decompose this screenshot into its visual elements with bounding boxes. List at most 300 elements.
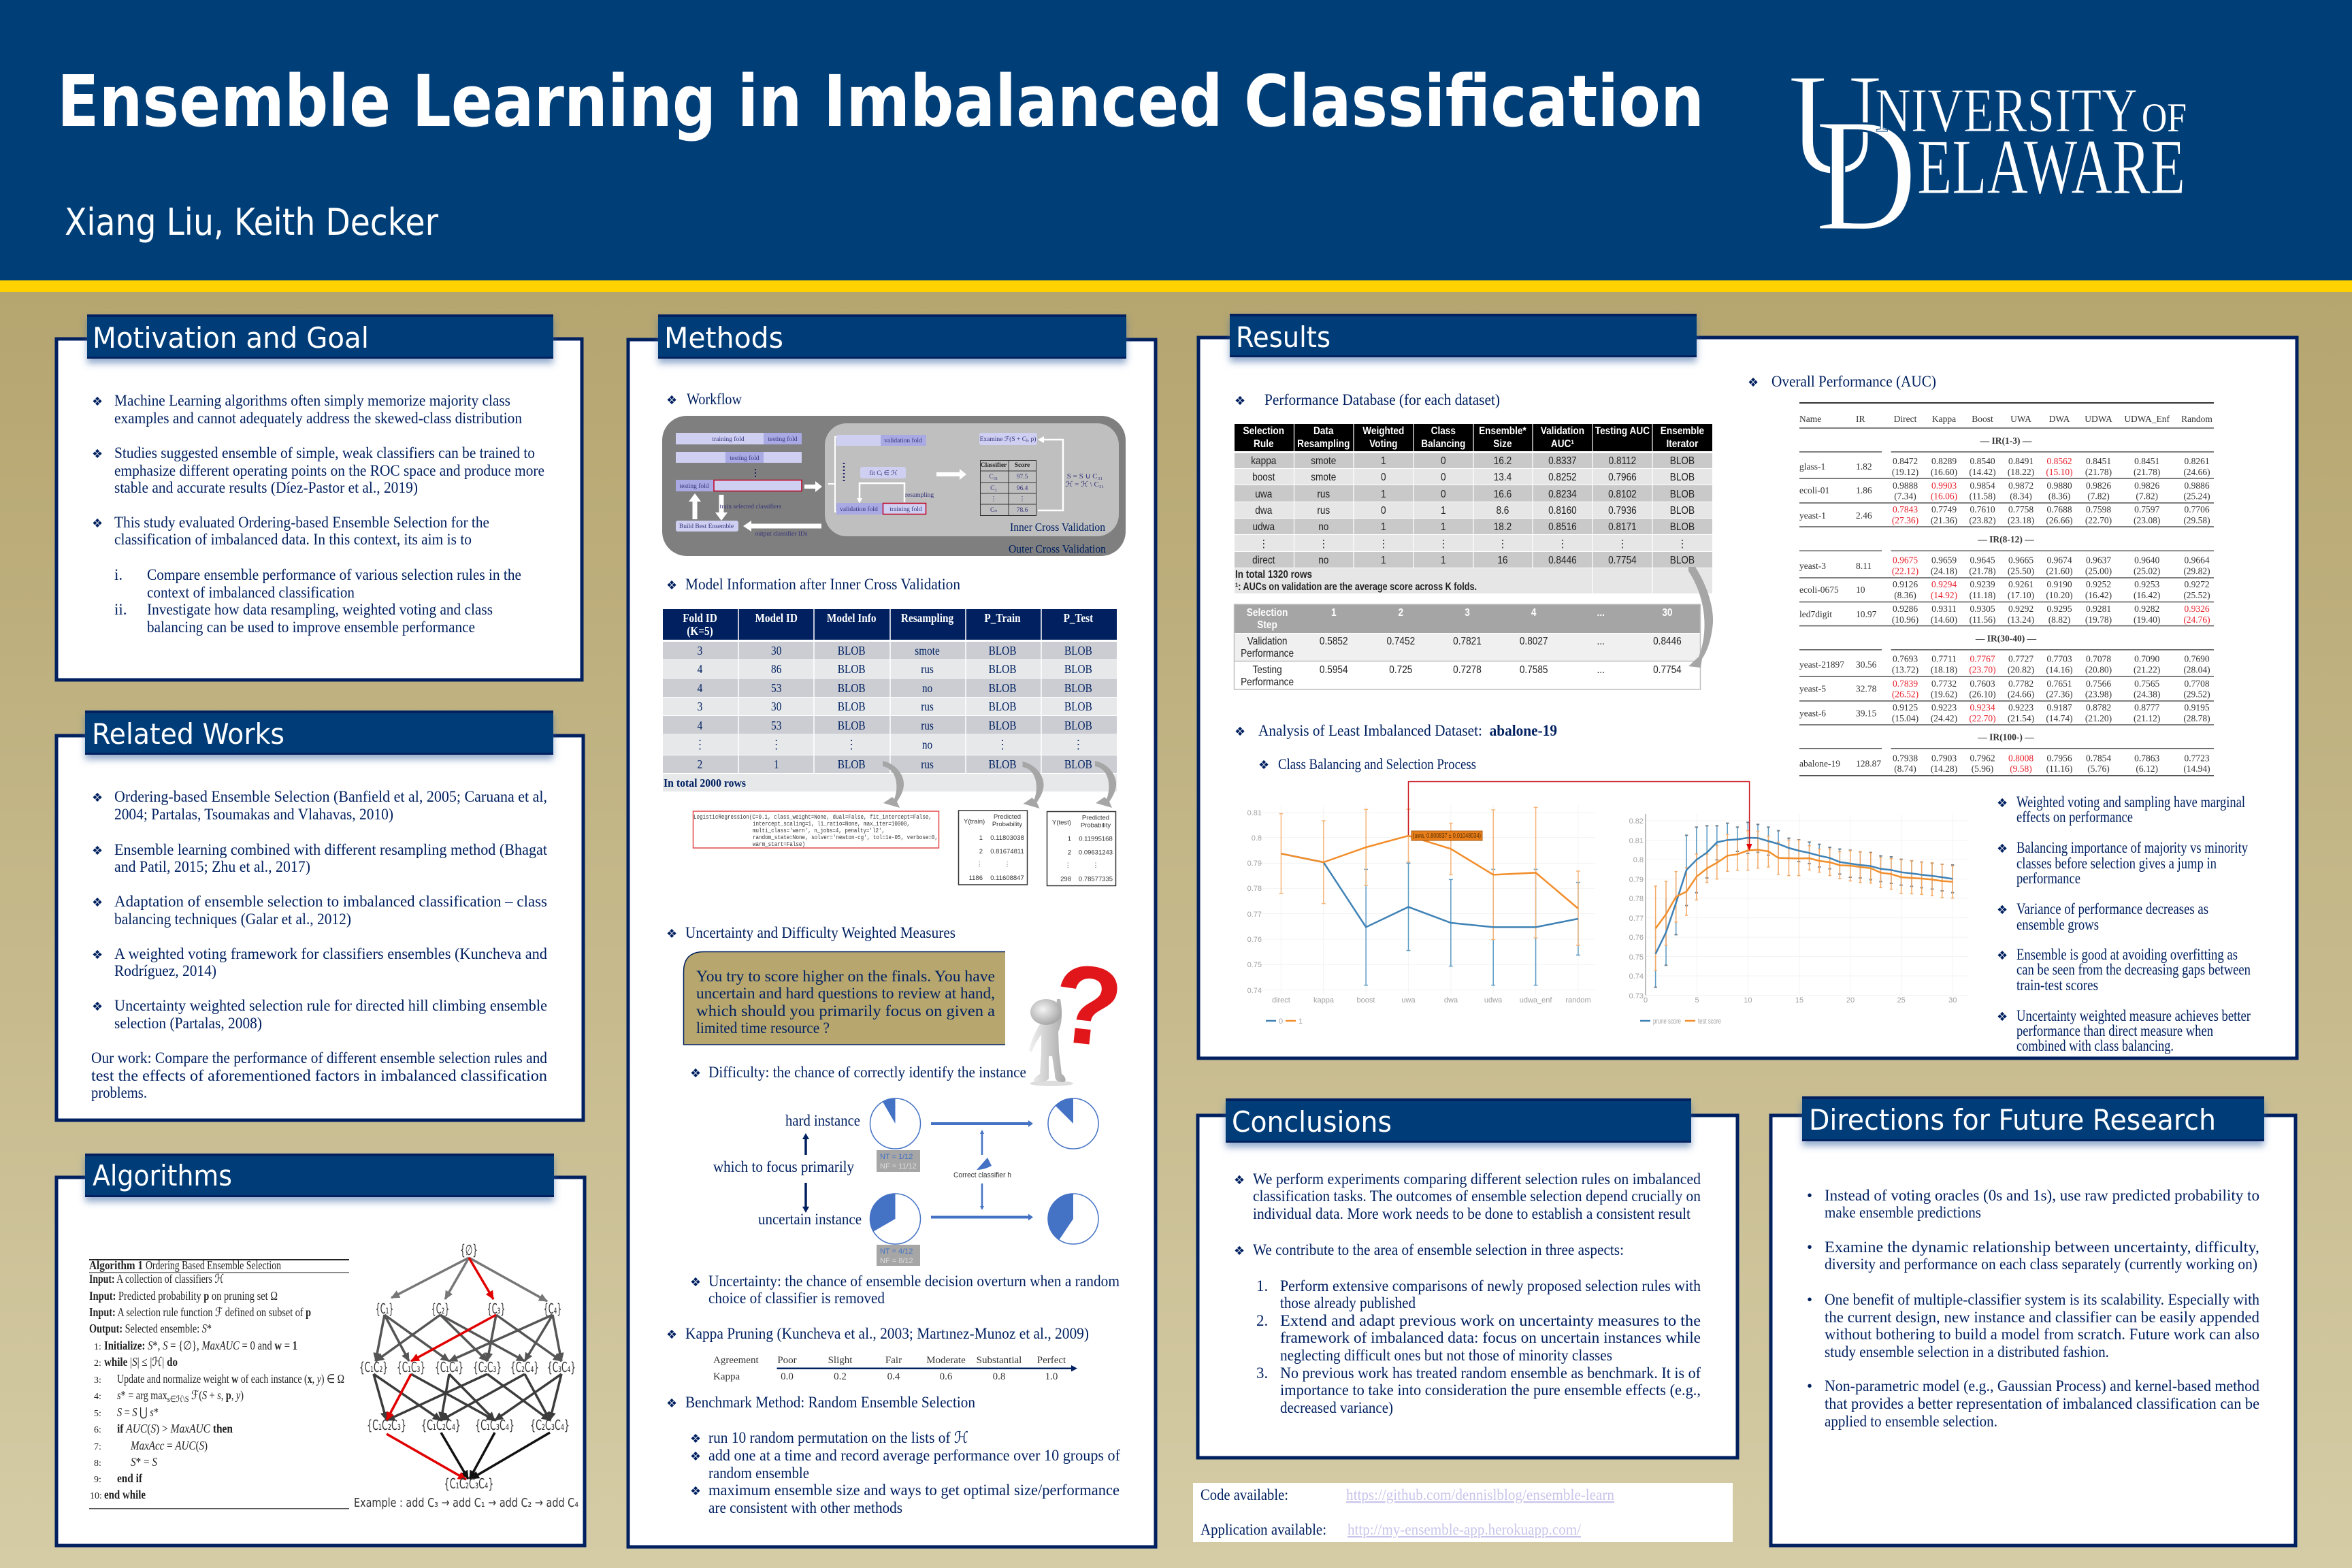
table: performance database: 0	[1381, 472, 1386, 483]
table: overall performance: 0.7603	[1970, 679, 1995, 689]
subheading: performance database: Performance Database (for each dataset)	[1264, 391, 1500, 408]
table: overall performance: 0.7690	[2184, 653, 2210, 664]
subheading: workflow	[666, 391, 742, 408]
table: performance database: udwa	[1253, 521, 1275, 533]
table: model information: BLOB	[1064, 644, 1092, 657]
table: overall performance: (21.78)	[1969, 566, 1996, 576]
lattice diagram: ordering based selection: {C₂C₃}	[473, 1359, 502, 1375]
table: overall performance: (21.22)	[2134, 664, 2160, 675]
table: performance database: ¹: AUCs on validation are the average score across K folds.	[1235, 581, 1477, 593]
caption: example selection order: Example : add C₃ → add C₁ → add C₂ → add C₄	[354, 1496, 578, 1510]
table: overall performance: yeast-6	[1799, 708, 1826, 719]
subheading: overall performance: Overall Performance (AUC)	[1771, 373, 1936, 390]
text: related works bullets: balancing techniques (Galar et al., 2012)	[114, 911, 351, 928]
text: benchmark bullets: random ensemble	[708, 1465, 809, 1482]
table: overall performance: (16.60)	[1931, 467, 1957, 477]
table: overall performance: (21.78)	[2085, 467, 2112, 477]
table: test probabilities: 1	[1068, 836, 1071, 843]
table: model information: Model ID	[755, 611, 798, 625]
table: performance database: ⋮	[1678, 538, 1687, 550]
table: overall performance: 128.87	[1856, 758, 1881, 769]
table: overall performance: 0.7651	[2046, 679, 2072, 689]
table: overall performance: (26.52)	[1892, 689, 1918, 700]
text: future research list: Examine the dynamic relationship between uncertainty, difficulty,	[1825, 1239, 2259, 1256]
text: conclusions list: importance to take into consideration the pure ensemble effects (e.g.,	[1280, 1382, 1701, 1399]
text: conclusions list	[1234, 1171, 1701, 1416]
table: overall performance: 10	[1856, 585, 1865, 595]
table: overall performance: (24.66)	[2008, 689, 2034, 700]
table: overall performance: (19.40)	[2134, 615, 2160, 625]
callout: code and application links	[1193, 1483, 1733, 1542]
table: train probabilities: 0.11608847	[990, 875, 1024, 882]
lattice diagram: ordering based selection: {C₁}	[376, 1301, 393, 1317]
scale: kappa agreement	[713, 1355, 1077, 1382]
table: model information: Fold ID	[683, 611, 717, 625]
table: performance database: ⋮	[1259, 538, 1269, 550]
pseudocode: algorithm 1: S + s, p, y)	[202, 1388, 244, 1402]
text: motivation bullets: Investigate how data resampling, weighted voting and class	[147, 601, 493, 618]
panel: related works	[56, 710, 583, 1120]
table: overall performance: 0.8261	[2184, 456, 2210, 466]
table: overall performance: (23.70)	[1969, 664, 1996, 675]
text: related works bullets	[91, 788, 548, 1101]
table: overall performance: 0.7566	[2086, 679, 2111, 689]
pseudocode: algorithm 1: Input: A selection rule function ℱ defined on subset of p	[89, 1305, 311, 1319]
table: overall performance: 0.7727	[2008, 653, 2034, 664]
table: performance database: 1	[1381, 521, 1386, 533]
table: performance database: 1	[1381, 455, 1386, 467]
table: model information: 2	[698, 757, 702, 771]
table: model information: 3	[698, 700, 702, 713]
table: performance database: 16	[1497, 555, 1507, 566]
table: selection steps: 3	[1465, 607, 1470, 619]
table: overall performance: 0.7758	[2008, 504, 2034, 514]
table: performance database: kappa	[1251, 455, 1277, 467]
table: model information: P_Train	[984, 611, 1021, 625]
table: overall performance: (10.96)	[1892, 615, 1918, 625]
pseudocode: algorithm 1: MaxAcc = AUC(S)	[130, 1439, 208, 1453]
table: overall performance: (29.58)	[2183, 515, 2210, 525]
table: overall performance: 0.7723	[2184, 753, 2210, 764]
table: model information: BLOB	[838, 719, 866, 732]
scale: kappa agreement: Moderate	[926, 1355, 966, 1366]
table: overall performance: 0.9272	[2184, 579, 2210, 589]
table: overall performance: 0.9826	[2134, 480, 2160, 491]
table: performance database: In total 1320 rows	[1235, 569, 1312, 581]
table: overall performance: 0.9640	[2134, 555, 2160, 565]
subheading: workflow: ❖	[666, 393, 677, 408]
table: performance database: 1	[1381, 555, 1386, 566]
table: selection steps	[1234, 604, 1701, 689]
table: performance database: 0	[1441, 455, 1446, 467]
text: motivation bullets: balancing can be used to improve ensemble performance	[147, 619, 475, 636]
workflow diagram: fit Cⱼ ∈ ℋ	[869, 470, 898, 477]
text: future research list: the current design, new instance and classifier can be easily appended	[1825, 1309, 2259, 1326]
table: model information: 4	[698, 719, 703, 732]
panel: conclusions	[1198, 1098, 1737, 1458]
scale: kappa agreement: Slight	[828, 1355, 853, 1366]
text: motivation bullets: ❖	[92, 447, 103, 461]
logo: University of Delaware	[1788, 44, 2187, 265]
text: difficulty definition: Difficulty: the chance of correctly identify the instance	[708, 1064, 1026, 1081]
table: performance database: 0.8446	[1548, 555, 1577, 566]
workflow diagram: training fold	[712, 436, 745, 443]
table: performance database: no	[1318, 555, 1328, 566]
table: overall performance: (19.78)	[2085, 615, 2112, 625]
text: related works bullets: problems.	[91, 1084, 147, 1101]
table: overall performance: ecoli-01	[1799, 485, 1829, 495]
table: train probabilities: Y(train)	[964, 818, 985, 826]
table: overall performance: Random	[2181, 414, 2212, 424]
pseudocode: algorithm 1: Input: A collection of classifiers ℋ	[89, 1272, 224, 1286]
pseudocode: algorithm 1: 4:	[94, 1392, 101, 1402]
tooltip: uwa value	[1411, 831, 1482, 840]
table: overall performance: 0.9281	[2086, 604, 2111, 614]
table: overall performance: (21.78)	[2134, 467, 2160, 477]
workflow diagram: train selected classifiers	[720, 503, 782, 510]
pseudocode: algorithm 1: end if	[117, 1471, 143, 1485]
workflow diagram: validation fold	[884, 437, 922, 444]
panel: results	[1198, 314, 2297, 1058]
table: overall performance: 0.9659	[1931, 555, 1957, 565]
table: performance database: ⋮	[1379, 538, 1388, 550]
table: performance database: Balancing	[1421, 438, 1465, 450]
table: model information: rus	[921, 719, 934, 732]
table: overall performance: (24.38)	[2134, 689, 2160, 700]
table: model information: rus	[921, 700, 934, 713]
lattice diagram: ordering based selection: {C₁C₂C₃}	[367, 1417, 406, 1433]
table: model information: 86	[771, 662, 781, 676]
table: overall performance: (8.36)	[2048, 491, 2070, 501]
table: test probabilities: Y(test)	[1052, 819, 1071, 826]
table: overall performance: 0.7749	[1931, 504, 1957, 514]
table: overall performance: 0.7706	[2184, 504, 2210, 514]
table: overall performance: 0.9645	[1970, 555, 1995, 565]
chart: selection rules by class balancing: 0.77	[1247, 911, 1262, 919]
table: overall performance: 0.9234	[1970, 702, 1995, 713]
panel: directions for future research	[1771, 1096, 2296, 1546]
scale: kappa agreement: Perfect	[1037, 1355, 1066, 1366]
chart: selection step performance: 5	[1695, 996, 1699, 1004]
lattice diagram: ordering based selection: {C₁C₃C₄}	[475, 1417, 514, 1433]
table: model information: rus	[921, 757, 934, 771]
lattice diagram: ordering based selection: {C₁C₂}	[359, 1359, 388, 1375]
table: model information: BLOB	[1064, 700, 1092, 713]
text: related works bullets: A weighted voting framework for classifiers ensembles (Kuncheva and	[114, 945, 547, 962]
table: overall performance: Kappa	[1932, 414, 1956, 424]
callout: code and application links: Application available:	[1200, 1521, 1326, 1538]
table: performance database: direct	[1252, 555, 1275, 566]
table: overall performance: yeast-1	[1799, 510, 1826, 521]
scale: kappa agreement: Fair	[885, 1355, 902, 1366]
text: conclusions list: individual data. More work needs to be done to establish a consistent result	[1253, 1205, 1691, 1222]
chart: selection step performance: 0.73	[1629, 992, 1644, 1000]
chart: selection rules by class balancing: udwa_enf	[1520, 996, 1552, 1004]
table: overall performance: 0.9311	[1931, 604, 1957, 614]
table: overall performance: (8.82)	[2048, 615, 2070, 625]
code box: logistic regression model: LogisticRegression(C=0.1, class_weight=None, dual=False, fit_intercept=False,	[693, 814, 932, 821]
table: performance database: Validation	[1541, 425, 1584, 437]
table: overall performance: 0.9195	[2184, 702, 2210, 713]
table: overall performance: (13.72)	[1892, 664, 1918, 675]
table: overall performance: 0.7688	[2046, 504, 2072, 514]
table: performance database: 0.8252	[1548, 472, 1577, 483]
workflow diagram: Classifier	[981, 462, 1007, 469]
arrow: iterator to selection table	[1688, 567, 1713, 668]
subheading: kappa pruning: ❖	[666, 1328, 677, 1342]
table: performance database: 0	[1441, 472, 1446, 483]
icon: thinking figure with question mark: ?	[1047, 940, 1128, 1071]
table: model information: ⋮	[771, 738, 781, 751]
table: overall performance: 0.9294	[1931, 579, 1957, 589]
table: overall performance: 0.7839	[1893, 679, 1918, 689]
table: overall performance: UDWA	[2085, 414, 2112, 424]
text: motivation bullets: Studies suggested ensemble of simple, weak classifiers can be trained to	[114, 444, 535, 461]
text: benchmark bullets: run 10 random permutation on the lists of ℋ	[708, 1429, 968, 1446]
table: model information: BLOB	[989, 700, 1016, 713]
pseudocode: algorithm 1: Update and normalize weight w of each instance (x, y) ∈ Ω	[117, 1372, 344, 1386]
table: performance database: Resampling	[1297, 438, 1350, 450]
table: overall performance: (11.58)	[1970, 491, 1995, 501]
table: overall performance: 0.7854	[2086, 753, 2111, 764]
text: uncertainty definition: Uncertainty: the chance of ensemble decision overturn when a random	[708, 1273, 1120, 1290]
table: overall performance: (9.58)	[2010, 764, 2032, 774]
text: related works bullets: Uncertainty weighted selection rule for directed hill climbing ensemble	[114, 997, 547, 1014]
subheading: benchmark method: Benchmark Method: Random Ensemble Selection	[685, 1394, 975, 1411]
table: overall performance: 0.7565	[2134, 679, 2160, 689]
chart: selection step performance: 0	[1644, 996, 1648, 1004]
workflow diagram: Examine ℱ(S + Cⱼ, p)	[980, 436, 1036, 443]
callout: code and application links: https://github.com/dennislblog/ensemble-learn	[1346, 1486, 1614, 1503]
text: future research list: •	[1807, 1187, 1812, 1204]
diagram: hard vs uncertain instance pies: NF = 8/12	[880, 1257, 913, 1265]
table: model information: 1	[774, 757, 779, 771]
table: overall performance: 0.7693	[1893, 653, 1918, 664]
table: overall performance: yeast-5	[1799, 683, 1826, 694]
scale: kappa agreement: Poor	[777, 1355, 797, 1366]
table: train probabilities: 2	[979, 848, 983, 855]
lattice diagram: ordering based selection: {C₃C₄}	[547, 1359, 576, 1375]
table: model information: P_Test	[1064, 611, 1094, 625]
table: train probabilities: Probability	[992, 821, 1022, 828]
subheading: performance database: ❖	[1235, 394, 1245, 408]
table: selection steps: 0.7754	[1653, 664, 1682, 676]
chart: selection step performance: 15	[1795, 996, 1803, 1004]
text: benchmark bullets	[690, 1429, 1120, 1516]
table: overall performance: 0.7708	[2184, 679, 2210, 689]
label: hard instance: hard instance	[785, 1112, 860, 1129]
callout: finals question: You try to score higher on the finals. You have	[696, 968, 995, 985]
table: overall performance: (14.60)	[1931, 615, 1957, 625]
table: overall performance: (18.22)	[2008, 467, 2034, 477]
table: overall performance: 0.8562	[2046, 456, 2072, 466]
table: overall performance: 39.15	[1856, 708, 1877, 719]
text: results takeaways: ensemble grows	[2016, 916, 2099, 933]
text: benchmark bullets: ❖	[690, 1450, 701, 1464]
text: related works bullets: ❖	[92, 896, 103, 910]
table: model information: 53	[771, 681, 781, 695]
text: conclusions list: framework of imbalanced data: focus on uncertain instances while	[1280, 1329, 1701, 1346]
text: uncertainty definition	[690, 1273, 1120, 1307]
table: performance database: ⋮	[1558, 538, 1567, 550]
scale: kappa agreement: 0.4	[887, 1371, 900, 1382]
lattice diagram: ordering based selection: {C₁C₃}	[397, 1359, 425, 1375]
text: future research list: make ensemble predictions	[1825, 1204, 1981, 1221]
table: overall performance: 0.9880	[2046, 480, 2072, 491]
table: selection steps: ...	[1597, 607, 1605, 619]
table: performance database: 1	[1441, 505, 1446, 517]
table: overall performance: 10.97	[1856, 609, 1877, 619]
text: conclusions list: those already published	[1280, 1294, 1416, 1311]
table: overall performance: 0.8540	[1970, 456, 1995, 466]
table: performance database: 18.2	[1494, 521, 1512, 533]
table: overall performance: 1.86	[1856, 485, 1872, 495]
pseudocode: algorithm 1: S = S ⋃ s*	[117, 1405, 159, 1419]
workflow diagram: C₃₁	[990, 474, 998, 480]
chart: selection step performance: 0.77	[1629, 915, 1644, 923]
label: focus question: which to focus primarily	[713, 1158, 854, 1175]
table: overall performance: 0.9239	[1970, 579, 1995, 589]
text: related works bullets: Our work: Compare the performance of different ensemble selection rules and	[91, 1049, 547, 1066]
table: overall performance: (17.10)	[2008, 590, 2034, 600]
table: model information: BLOB	[1064, 662, 1092, 676]
lattice diagram: ordering based selection: {C₄}	[543, 1301, 562, 1317]
table: model information: BLOB	[989, 757, 1016, 771]
table: overall performance: (8.36)	[1894, 590, 1916, 600]
text: related works bullets: Adaptation of ensemble selection to imbalanced classification – class	[114, 893, 547, 910]
text: related works bullets: ❖	[92, 791, 103, 805]
heading: motivation and goal	[87, 314, 553, 359]
table: overall performance: — IR(100-) —	[1977, 732, 2034, 742]
workflow diagram: ⋮	[990, 496, 997, 503]
pseudocode: algorithm 1: 1:	[94, 1342, 101, 1352]
chart: selection step performance: 0.78	[1629, 895, 1644, 903]
callout: finals question: uncertain and hard questions to review at hand,	[696, 985, 995, 1002]
table: overall performance: (27.36)	[1892, 515, 1918, 525]
heading: motivation and goal: Motivation and Goal	[93, 321, 369, 355]
text: conclusions list: We perform experiments comparing different selection rules on imbalanced	[1253, 1171, 1701, 1188]
table: overall performance: 0.8777	[2134, 702, 2160, 713]
workflow diagram: validation fold	[840, 506, 878, 513]
text: conclusions list: Extend and adapt previous work on uncertainty measures to the	[1280, 1312, 1701, 1329]
table: test probabilities: 0.11995168	[1079, 836, 1113, 843]
text: future research list	[1807, 1187, 2259, 1430]
table: overall performance: (22.70)	[2085, 515, 2112, 525]
text: related works bullets: Ensemble learning combined with different resampling method (Bhagat	[114, 841, 548, 858]
text: results takeaways: effects on performance	[2016, 808, 2133, 826]
table: overall performance	[1799, 403, 2214, 776]
table: model information	[663, 609, 1117, 791]
table: overall performance: (24.18)	[1931, 566, 1957, 576]
table: overall performance: (21.36)	[1931, 515, 1957, 525]
pseudocode: algorithm 1: ℱ(	[189, 1388, 202, 1403]
workflow diagram: testing fold	[768, 436, 798, 443]
heading: results	[1230, 314, 1697, 357]
table: model information: In total 2000 rows	[664, 777, 746, 789]
text: motivation bullets: stable and accurate results (Díez-Pastor et al., 2019)	[114, 479, 418, 496]
text: conclusions list: We contribute to the area of ensemble selection in three aspects:	[1253, 1241, 1624, 1258]
callout: code and application links: Code available:	[1200, 1486, 1288, 1503]
table: overall performance: 2.46	[1856, 510, 1872, 521]
table: model information: 3	[698, 644, 702, 657]
chart: selection step performance: 0.74	[1629, 973, 1644, 981]
callout: finals question	[683, 951, 1005, 1045]
table: selection steps: ...	[1597, 664, 1605, 676]
text: related works bullets: test the effects of aforementioned factors in imbalanced classification	[91, 1067, 548, 1084]
pseudocode: algorithm 1: 7:	[94, 1442, 101, 1452]
text: future research list: One benefit of multiple-classifier system is its scalability. Especially with	[1825, 1291, 2259, 1308]
text: conclusions list: ❖	[1234, 1173, 1245, 1188]
text: future research list: diversity and performance on each class separately (currently working on)	[1825, 1256, 2257, 1273]
heading: directions for future research: Directions for Future Research	[1809, 1103, 2216, 1137]
table: overall performance: ecoli-0675	[1799, 585, 1839, 595]
table: train probabilities: Predicted	[994, 813, 1021, 821]
table: overall performance: (21.12)	[2134, 713, 2160, 723]
table: overall performance: (14.28)	[1931, 764, 1957, 774]
chart: selection rules by class balancing: 0.79	[1247, 860, 1262, 868]
chart: selection rules by class balancing: 0.8	[1252, 834, 1262, 843]
pseudocode: algorithm 1: 3:	[94, 1375, 101, 1386]
table: selection steps: 0.5954	[1320, 664, 1348, 676]
table: selection steps: Validation	[1247, 636, 1287, 647]
callout: finals question: which should you primarily focus on given a	[696, 1002, 995, 1019]
table: model information: (K=5)	[687, 624, 713, 638]
table: overall performance: (16.42)	[2134, 590, 2160, 600]
table: overall performance: (5.96)	[1972, 764, 1993, 774]
table: overall performance: (29.52)	[2183, 689, 2210, 700]
table: overall performance: (21.54)	[2008, 713, 2034, 723]
table: train probabilities: ⋮	[976, 861, 983, 868]
chart: selection step performance: 0.79	[1629, 876, 1644, 884]
table: selection steps: 0.7585	[1520, 664, 1548, 676]
table: performance database: BLOB	[1670, 555, 1695, 566]
panel: motivation and goal	[56, 314, 582, 680]
chart: selection rules by class balancing: uwa	[1401, 996, 1416, 1004]
table: performance database: 0.8112	[1609, 455, 1636, 467]
table: overall performance: glass-1	[1799, 461, 1825, 472]
table: performance database: 0.7754	[1608, 555, 1637, 566]
text: conclusions list: neglecting difficult ones but not those of minority classes	[1280, 1347, 1612, 1364]
table: overall performance: 0.9675	[1893, 555, 1918, 565]
table: overall performance: 0.9326	[2184, 604, 2210, 614]
subheading: kappa pruning: Kappa Pruning (Kuncheva et al., 2003; Martınez-Munoz et al., 2009)	[685, 1325, 1089, 1342]
chart: selection step performance: 20	[1846, 996, 1855, 1004]
table: overall performance: 30.56	[1856, 659, 1877, 670]
table: performance database: uwa	[1255, 489, 1273, 500]
panel: methods	[628, 314, 1156, 1547]
table: performance database: 8.6	[1496, 505, 1509, 517]
table: overall performance: 0.9261	[2008, 579, 2034, 589]
scale: kappa agreement: 0.2	[834, 1371, 847, 1382]
text: motivation bullets: context of imbalanced classification	[147, 584, 355, 601]
scale: kappa agreement: 0.8	[993, 1371, 1005, 1382]
table: model information: 30	[771, 700, 781, 713]
table: performance database: 0.7966	[1608, 472, 1637, 483]
table: overall performance: (26.10)	[1969, 689, 1996, 700]
table: overall performance: 0.8491	[2008, 456, 2034, 466]
table: overall performance: 1.82	[1856, 461, 1872, 472]
table: overall performance: 0.9286	[1893, 604, 1918, 614]
chart: selection step performance: 30	[1948, 996, 1957, 1004]
table: overall performance: (25.02)	[2134, 566, 2160, 576]
lattice diagram: ordering based selection: {C₂}	[431, 1301, 449, 1317]
chart: selection rules by class balancing: 0.74	[1247, 987, 1262, 995]
pseudocode: algorithm 1: Input: Predicted probability p on pruning set Ω	[89, 1289, 278, 1303]
text: benchmark bullets: add one at a time and record average performance over 10 groups of	[708, 1447, 1120, 1464]
table: performance database: 0	[1441, 489, 1446, 500]
text: motivation bullets: ❖	[92, 517, 103, 531]
text: conclusions list: decreased variance)	[1280, 1399, 1393, 1416]
